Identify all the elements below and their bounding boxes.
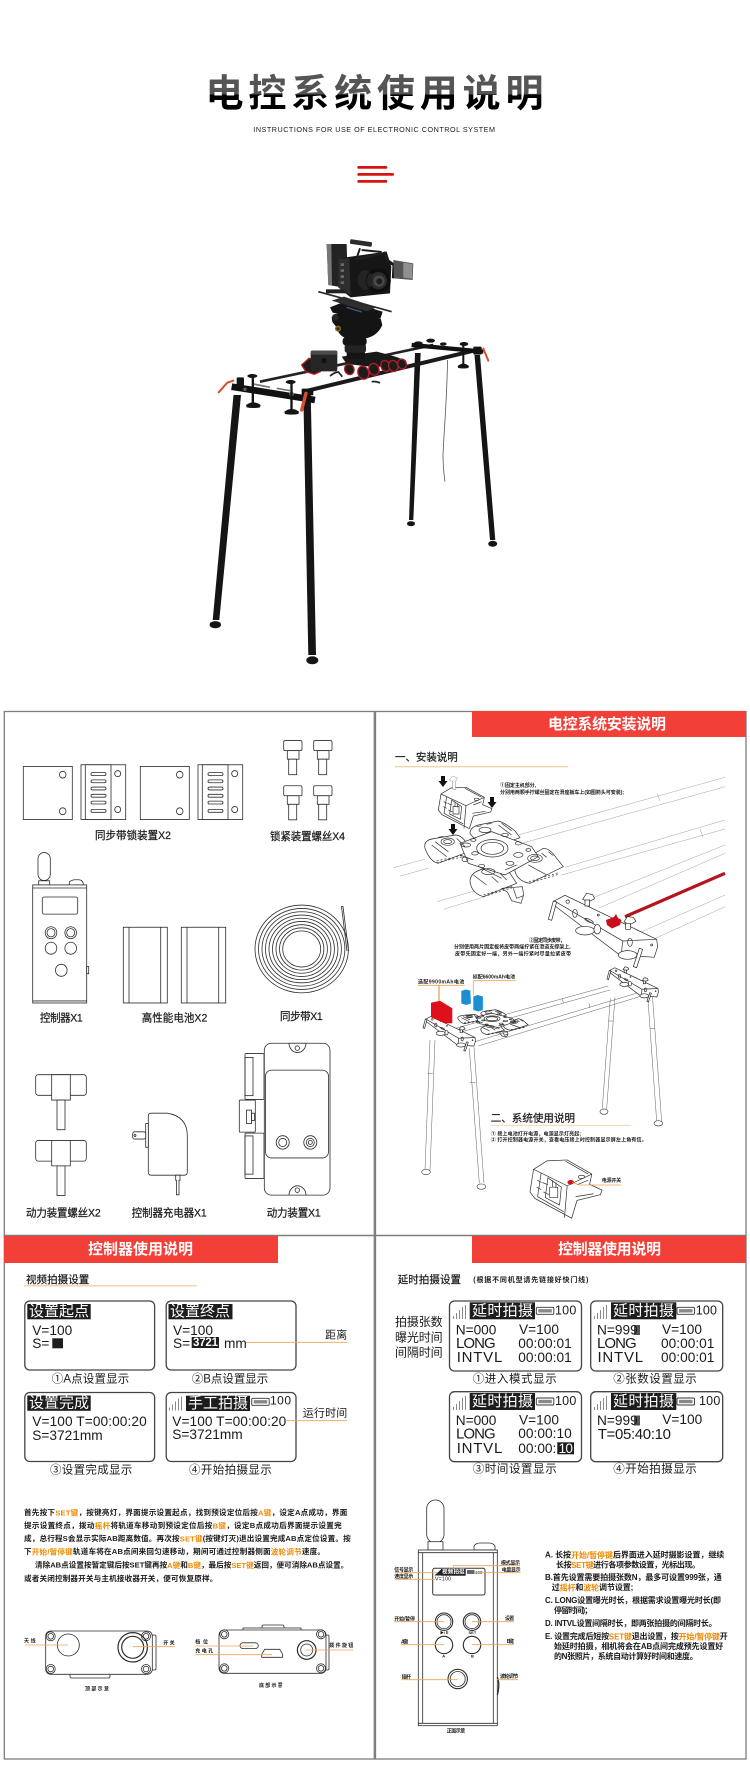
LCD 3: set done: S=3721mm [32,1428,103,1443]
callout: run time: 运行时间 [303,1406,347,1419]
LCD 2: set end: V=100 [173,1323,213,1338]
note: step 2: 皮带先固定好一端，另外一端拧紧时尽量拉紧皮带 [455,950,571,957]
caption 2: ②B点设置显示 [192,1373,268,1386]
caption: bottom view: 底部示意 [259,1682,283,1689]
LCD: count setting: LONG [597,1335,637,1352]
label: B key: B键 [507,1638,514,1645]
note: step 2: 分别使用两片固定板将皮带两端拧紧在滑道支撑架上, [454,943,571,950]
controller front diagram: A [442,1654,445,1658]
label: signal: 信号显示 [394,1566,413,1574]
timelapse parameter labels: 拍摄张数 [395,1314,443,1329]
text block: video setup instructions: 清除AB点设置按暂定键后按SET键再按A键和B键，最后按SET键返回，便可消除AB点设置。 [35,1560,348,1570]
LCD: count setting: 00:00:01 [661,1336,714,1351]
caption 3: ③设置完成显示 [50,1462,132,1476]
red belt [625,873,725,917]
title: 电控系统使用说明 [206,73,544,115]
batteries [123,927,226,1003]
text block: timelapse steps: 始延时拍摄，相机将会在AB点间完成预先设置好 [554,1641,723,1651]
rails [260,345,433,382]
text block: timelapse steps: 过摇杆和波轮调节设置; [552,1582,633,1592]
label: drive unit: 动力装置X1 [267,1206,321,1219]
heading: timelapse setup: 延时拍摄设置 [398,1273,461,1286]
icon: red battery [431,1001,452,1023]
text block: timelapse steps: 停留时间)； [554,1605,592,1615]
fluid head and column [330,297,383,359]
callout: power switch: 电源开关 [602,1177,621,1184]
note: step 1 [500,782,624,796]
LCD: timelapse running [591,1392,723,1462]
LCD: time setting: 00:00:10 [518,1426,572,1441]
drive unit [239,1043,330,1195]
icon: red belt clamp [606,914,622,928]
header: controller right: 控制器使用说明 [558,1240,661,1258]
caption: enter mode: ①进入模式显示 [473,1373,557,1386]
label: speed: 速度显示 [394,1573,413,1580]
label: gear: 档位 [195,1639,208,1646]
header: controller left: 控制器使用说明 [88,1240,193,1258]
LCD: time setting: V=100 [519,1412,559,1428]
LCD 1: set start: S= [32,1336,49,1351]
rails and belt [393,777,725,940]
orange levers [219,349,488,410]
controller front diagram: V=100 [435,1576,451,1582]
label: dial: 拨件旋钮 [329,1642,353,1649]
black arrows [438,776,496,835]
heading: timelapse setup [398,1273,588,1286]
callout: run time [286,1406,347,1421]
controller front diagram: 100 [475,1570,483,1575]
label: drive screws: 动力装置螺丝X2 [26,1206,101,1219]
bottom view diagram [195,1625,353,1673]
caption 4: ④开始拍摄显示 [189,1462,272,1476]
charger [133,1113,187,1195]
LCD: count setting: 延时拍摄 [613,1302,674,1319]
callout: distance: 距离 [325,1327,347,1341]
text: system use notes: ② 打开控制器电源开关，查看电压接上时控制器显示屏左上角有信。 [491,1137,647,1144]
header: controller left [4,1236,278,1263]
LCD: enter mode: N=000 [456,1322,497,1338]
label: A key: A键 [401,1638,408,1645]
text block: video setup instructions: 或者关闭控制器开关与主机接收器开关，便可恢复原样。 [24,1573,217,1583]
LCD 4: start shooting [166,1392,296,1462]
LCD: enter mode: 100 [555,1303,576,1317]
motor with power switch [530,1160,602,1218]
text block: timelapse steps: 长按SET键进行各项参数设置，光标出现。 [556,1560,700,1570]
panel: installation guide [393,750,725,1218]
LCD: count setting: INTVL [598,1349,643,1366]
controller front diagram: SET [468,1630,477,1635]
caption: count setting: ②张数设置显示 [613,1372,697,1386]
LCD 4: start shooting: 手工拍摄 [188,1395,248,1412]
note: step 1: 分别用两颗手拧螺丝固定在滑座板车上(如图箭头可安装); [500,789,624,796]
icon: blue batteries [461,990,483,1012]
LCD: timelapse running: V=100 [662,1412,703,1427]
heading: timelapse setup: (根据不同机型请先链接好快门线) [473,1275,588,1284]
LCD 3: set done: 设置完成 [29,1395,89,1412]
text block: video setup instructions: 成，总行程S会显示实际AB距离数值。再次按SET键(按键灯灭)退出设置完成AB点定位设置。按 [24,1533,351,1543]
belt lock plates [23,765,243,820]
rail end drawing [548,893,658,968]
label: controller: 控制器X1 [40,1011,83,1025]
LCD 2: set end: 设置终点 [170,1303,230,1320]
text block: timelapse steps: E. 设置完成后短按SET键退出设置，按开始/暂停键开 [545,1631,728,1641]
caption: time setting: ③时间设置显示 [473,1462,557,1475]
LCD: count setting [591,1301,723,1371]
controller front diagram: B [471,1654,474,1658]
controller front diagram: ▶/Ⅱ [440,1630,449,1635]
camera [326,289,348,293]
LCD 2: set end: 3721 [193,1337,219,1349]
subtitle: INSTRUCTIONS FOR USE OF ELECTRONIC CONTROL SYSTEM [253,125,495,134]
label: charger: 控制器充电器X1 [132,1206,207,1219]
label: antenna: 天线 [24,1638,36,1645]
controller front diagram: 视频拍摄 [442,1567,465,1575]
LCD: timelapse running: T=05:40:10 [598,1426,671,1443]
LCD: enter mode [450,1301,582,1371]
label: lock screws: 锁紧装置螺丝X4 [270,830,345,843]
LCD: count setting: 100 [696,1303,717,1317]
product photo: slider rig with camera [210,239,497,664]
frame assembly drawing [422,986,663,1189]
drive screws [36,1075,86,1196]
LCD 2: set end [166,1301,296,1370]
lock screws [284,741,332,820]
timelapse parameter labels [395,1314,443,1359]
heading: video setup: 视频拍摄设置 [26,1273,89,1286]
text block: timelapse steps: D. INTVL设置间隔时长，即两张拍摄的间隔时长。 [545,1618,717,1628]
LCD: enter mode: LONG [456,1335,496,1352]
panel frames [4,712,746,1759]
caption: front view: 正面示意 [447,1727,465,1734]
frame carriage [458,1010,528,1037]
callout: standard battery [473,973,516,995]
legs [210,353,497,664]
top view diagram [24,1631,175,1678]
panel: parts list [23,741,349,1219]
knobs [237,339,482,415]
caption: top view: 顶部示意 [85,1686,109,1693]
header: controller right [472,1236,746,1263]
motor unit drawing [438,776,492,829]
carriage drawing [425,821,563,903]
LCD: time setting: LONG [456,1426,496,1442]
label: mode: 模式显示 [501,1559,520,1566]
LCD 2: set end: mm [224,1336,247,1351]
text block: video setup instructions [24,1507,351,1583]
label: set: 设置 [505,1615,514,1622]
LCD 1: set start [25,1301,155,1370]
text block: timelapse steps: B.首先设置需要拍摄张数N，最多可设置999张，通 [545,1572,722,1582]
text: system use notes [491,1130,647,1144]
LCD: time setting: 00:00: [518,1441,556,1456]
text block: timelapse steps: A. 长按开始/暂停键后界面进入延时摄影设置，继续 [545,1550,724,1560]
LCD 1: set start: V=100 [32,1323,73,1338]
icon: red three-bar ornament [357,166,394,183]
header: installation: 电控系统安装说明 [548,715,666,733]
LCD: timelapse running: 100 [699,1394,720,1408]
label: batteries: 高性能电池X2 [142,1011,207,1025]
label: charge port: 充电孔 [195,1648,213,1655]
LCD: time setting [450,1392,582,1462]
LCD: time setting: 100 [555,1394,576,1408]
label: power: 电量显示 [502,1566,521,1573]
label: joystick: 摇杆 [402,1673,411,1680]
LCD 1: set start: 设置起点 [29,1303,89,1320]
note: step 2 [454,937,571,957]
LCD: timelapse running: 延时拍摄 [613,1393,674,1410]
text block: video setup instructions: 提示设置终点，拨动摇杆将轨道车移动到预设定位后按B键，设定B点成功后界面提示设置完 [24,1520,342,1530]
LCD: count setting: 00:00:01 [661,1350,714,1365]
timing belt coil [255,905,348,993]
LCD 3: set done [25,1392,155,1462]
slider top drawn in zoomed coordinates [219,239,488,415]
label: belt lock: 同步带锁装置X2 [95,829,171,842]
LCD 4: start shooting: 100 [270,1394,291,1408]
text block: video setup instructions: 下开始/暂停键轨道车将在AB点间来回匀速移动，期间可通过控制器侧面波轮调节速度。 [24,1546,325,1556]
note: step 2: ②固定同步皮带， [529,937,565,944]
label: thumb wheel: 波轮调节 [500,1673,518,1680]
text block: timelapse steps: C. LONG设置曝光时长，根据需求设置曝光时长(即 [545,1595,721,1605]
controller front diagram [394,1500,521,1726]
caption 1: ①A点设置显示 [52,1373,129,1386]
controller [33,853,89,1003]
LCD 4: start shooting: V=100 T=00:00:20 [172,1414,287,1429]
LCD: count setting: V=100 [662,1322,702,1337]
label: switch: 开关 [163,1640,175,1647]
LCD: count setting: N=999 [597,1322,638,1338]
carriage [302,358,320,374]
LCD 2: set end: S= [173,1336,190,1351]
LCD: timelapse running: N=999 [597,1413,638,1428]
heading: system use: 二、系统使用说明 [491,1111,575,1124]
LCD: enter mode: 00:00:01 [518,1350,572,1365]
callout: optional battery: 选配9900mAh电池 [418,978,464,985]
text: system use notes: ① 接上电池打开电源，电源显示灯亮起; [491,1130,581,1137]
callout: optional battery [418,978,464,1001]
LCD: enter mode: INTVL [457,1349,502,1366]
LCD: time setting: 延时拍摄 [472,1393,533,1410]
timelapse parameter labels: 曝光时间 [395,1330,443,1344]
text block: timelapse steps [545,1550,728,1661]
text block: timelapse steps: 的N张照片，系统自动计算好时间和速度。 [554,1651,698,1661]
LCD: enter mode: V=100 [519,1322,559,1337]
LCD 4: start shooting: S=3721mm [172,1427,243,1442]
frame end pieces [423,967,658,1051]
callout: power switch [567,1177,622,1185]
callout: standard battery: 标配6600mAh电池 [473,973,515,980]
timelapse parameter labels: 间隔时间 [395,1345,443,1359]
LCD: time setting: 10 [558,1441,573,1456]
LCD: enter mode: 00:00:01 [518,1336,572,1351]
LCD: enter mode: 延时拍摄 [472,1302,533,1319]
header: installation [472,711,746,737]
caption: start shooting: ④开始拍摄显示 [613,1461,697,1475]
text block: video setup instructions: 首先按下SET键，按键亮灯，界面提示设置起点，找到预设定位后按A键，设定A点成功，界面 [24,1507,348,1517]
callout: distance [246,1327,347,1342]
LCD: time setting: INTVL [457,1440,502,1457]
LCD 3: set done: V=100 T=00:00:20 [32,1414,147,1429]
heading: install: 一、安装说明 [395,750,458,764]
note: step 1: ①固定主机部分, [500,782,537,789]
label: start pause: 开始/暂停 [394,1615,415,1622]
label: belt: 同步带X1 [280,1011,323,1023]
LCD: time setting: N=000 [456,1413,497,1428]
